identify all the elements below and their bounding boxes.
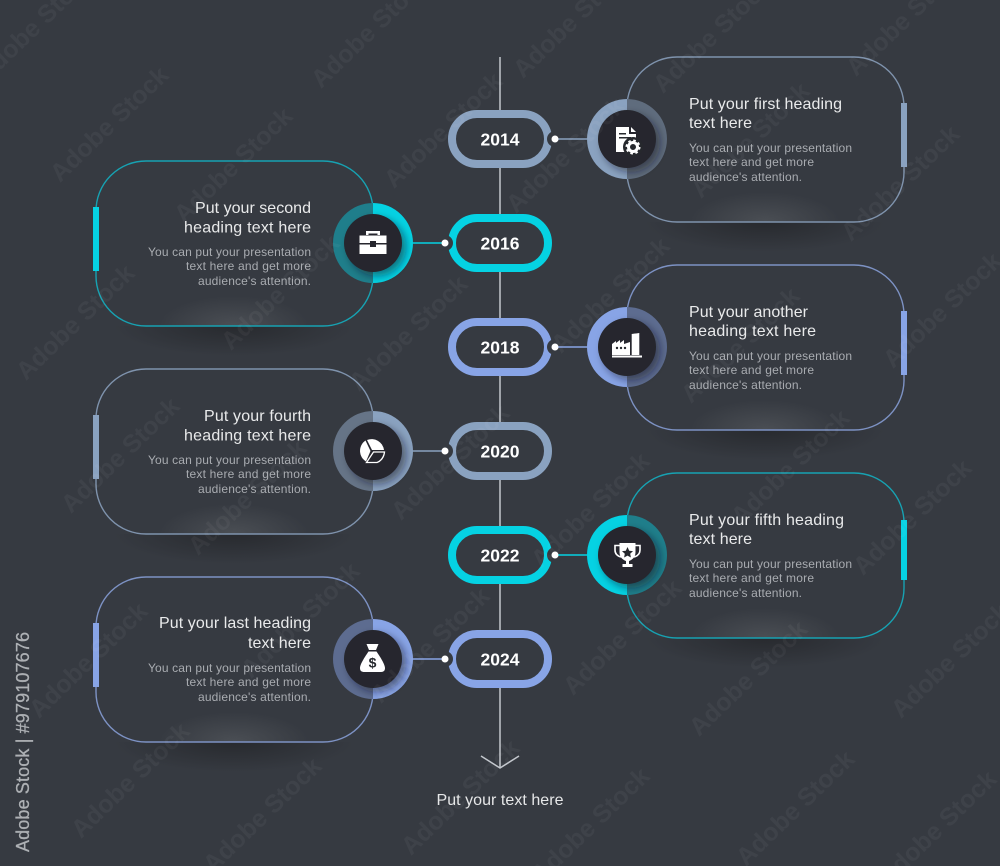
year pill 2022 [452, 530, 563, 580]
year pill 2024 [437, 634, 548, 684]
heading and body text: text here and get more [689, 363, 814, 377]
icon: pie chart [360, 439, 384, 462]
year pill 2018 [452, 322, 563, 372]
watermark pattern: Adobe Stock [558, 574, 687, 700]
icon: document with gear [616, 127, 643, 157]
ring badge [587, 515, 667, 595]
heading and body text: Put your first heading [689, 96, 842, 113]
vertical stock id text: Adobe Stock | #979107676 [13, 632, 33, 852]
year pill 2022: 2022 [481, 546, 520, 566]
heading and body text: heading text here [184, 220, 311, 236]
year pill 2018: 2018 [481, 338, 520, 358]
year pill 2014: 2014 [481, 130, 520, 150]
watermark pattern: Adobe Stock [169, 102, 298, 228]
milestone 2022 [452, 473, 907, 668]
watermark pattern: Adobe Stock [366, 582, 495, 708]
heading and body text: heading text here [689, 323, 816, 340]
card: second heading [93, 161, 373, 356]
heading and body text: heading text here [184, 428, 311, 444]
year pill 2016 [437, 218, 548, 268]
card: fifth heading [627, 473, 907, 668]
watermark pattern: Adobe Stock [344, 270, 473, 396]
heading and body text: You can put your presentation [689, 557, 852, 571]
heading and body text [148, 408, 311, 496]
watermark pattern: Adobe Stock [526, 447, 655, 573]
milestone 2020 [93, 369, 548, 564]
heading and body text: You can put your presentation [148, 245, 311, 259]
connector [410, 240, 448, 246]
icon: briefcase [360, 231, 386, 254]
ring badge [333, 203, 413, 283]
heading and body text: Put your last heading [159, 615, 311, 632]
heading and body text: text here [248, 635, 311, 652]
ring badge [587, 307, 667, 387]
watermark pattern: Adobe Stock [56, 392, 185, 518]
heading and body text: text here and get more [186, 467, 311, 481]
year pill 2020: 2020 [481, 442, 520, 462]
watermark pattern: Adobe Stock [236, 557, 365, 683]
heading and body text: Put your another [689, 304, 809, 321]
watermark pattern: Adobe Stock [11, 259, 140, 385]
watermark pattern: Adobe Stock [45, 61, 174, 187]
heading and body text [689, 304, 852, 392]
year pill 2024: 2024 [481, 650, 520, 670]
card: first heading [627, 57, 907, 252]
ring badge [333, 619, 413, 699]
icon: factory [612, 333, 642, 358]
connector [552, 344, 590, 350]
heading and body text: audience's attention. [689, 378, 802, 392]
watermark pattern: Adobe Stock [216, 229, 345, 355]
heading and body text: You can put your presentation [689, 349, 852, 363]
watermark pattern: Adobe Stock [546, 232, 675, 358]
watermark pattern: Adobe Stock [836, 120, 965, 246]
heading and body text: You can put your presentation [689, 141, 852, 155]
heading and body text [689, 96, 852, 184]
icon: trophy [615, 543, 640, 567]
heading and body text: audience's attention. [689, 586, 802, 600]
watermark pattern: Adobe Stock [848, 454, 977, 580]
heading and body text: text here and get more [186, 675, 311, 689]
heading and body text [689, 512, 852, 600]
watermark pattern: Adobe Stock [66, 717, 195, 843]
icon: money bag [360, 644, 385, 672]
watermark pattern: Adobe Stock [183, 434, 312, 560]
heading and body text: text here and get more [689, 571, 814, 585]
heading and body text: audience's attention. [689, 170, 802, 184]
watermark pattern: Adobe Stock [726, 404, 855, 530]
heading and body text [148, 200, 311, 288]
heading and body text: text here [689, 531, 752, 548]
milestone 2024 [93, 577, 548, 772]
heading and body text: text here and get more [689, 155, 814, 169]
timeline axis with arrow [481, 57, 519, 768]
heading and body text: audience's attention. [198, 274, 311, 288]
card: another heading [627, 265, 907, 460]
connector [552, 552, 590, 558]
footer caption: Put your text here [436, 792, 564, 809]
connector [552, 136, 590, 142]
heading and body text: Put your fifth heading [689, 512, 844, 529]
heading and body text: Put your fourth [204, 408, 311, 425]
watermark pattern: Adobe Stock [686, 77, 815, 203]
ring badge [587, 99, 667, 179]
year pill 2014 [452, 114, 563, 164]
icon: money bag: $ [369, 654, 377, 670]
heading and body text: audience's attention. [198, 482, 311, 496]
year pill 2020 [437, 426, 548, 476]
connector [410, 656, 448, 662]
heading and body text: audience's attention. [198, 690, 311, 704]
heading and body text [148, 615, 311, 704]
watermark pattern: Adobe Stock [396, 734, 525, 860]
card: fourth heading [93, 369, 373, 564]
milestone 2018 [452, 265, 907, 460]
milestone 2014 [452, 57, 907, 252]
heading and body text: You can put your presentation [148, 661, 311, 675]
heading and body text: Put your second [195, 200, 311, 217]
heading and body text: You can put your presentation [148, 453, 311, 467]
watermark pattern: Adobe Stock [501, 92, 630, 218]
watermark pattern: Adobe Stock [684, 615, 813, 741]
heading and body text: text here and get more [186, 259, 311, 273]
milestone 2016 [93, 161, 548, 356]
heading and body text: text here [689, 115, 752, 132]
connector [410, 448, 448, 454]
card: last heading [93, 577, 373, 772]
watermark pattern: Adobe Stock [24, 597, 153, 723]
watermark pattern: Adobe Stock [386, 399, 515, 525]
ring badge [333, 411, 413, 491]
watermark pattern: Adobe Stock [676, 282, 805, 408]
year pill 2016: 2016 [481, 234, 520, 254]
watermark pattern: Adobe Stock [379, 67, 508, 193]
